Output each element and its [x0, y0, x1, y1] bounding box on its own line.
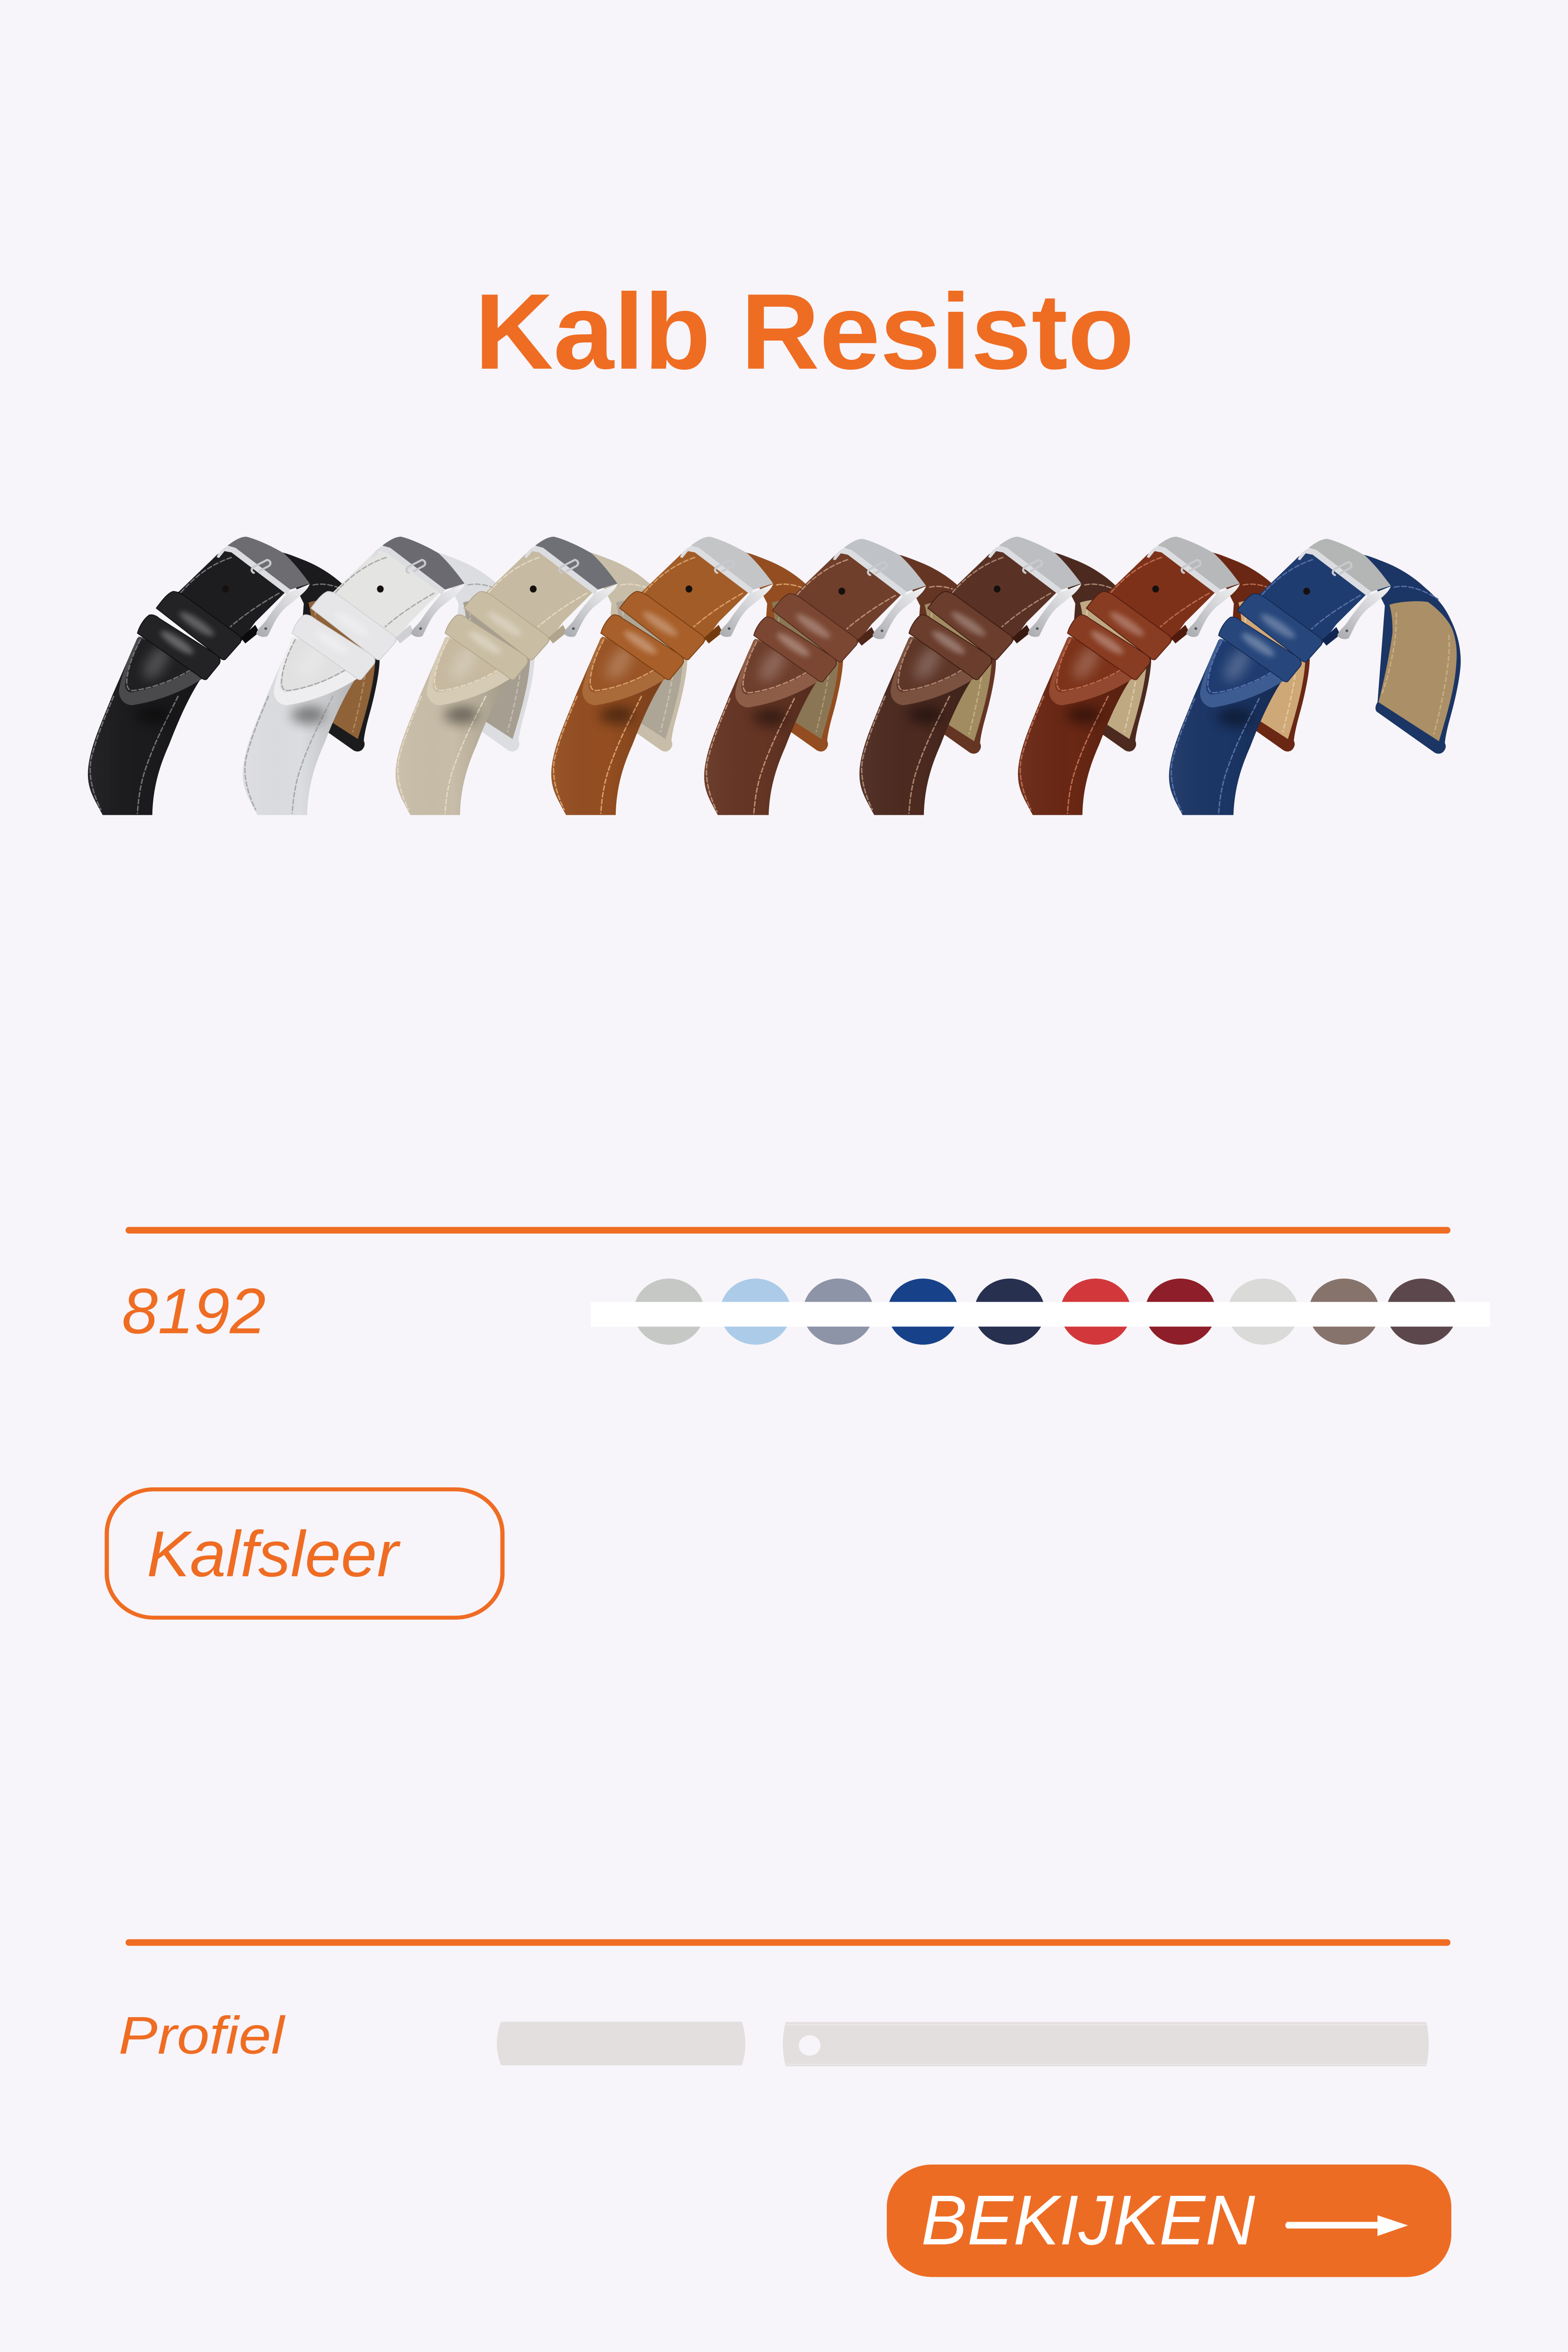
- white band over swatches: [591, 1302, 1490, 1327]
- watch strap row: [88, 537, 1461, 821]
- title: Kalb Resisto: [475, 272, 1134, 392]
- colour swatches: [634, 1279, 1457, 1345]
- strap: red brown: [1018, 537, 1310, 819]
- strap: navy: [1169, 539, 1461, 821]
- button: BEKIJKEN: [921, 2181, 1256, 2259]
- strap: medium brown: [704, 539, 996, 821]
- divider line bottom: [126, 1939, 1450, 1946]
- strap: beige: [396, 537, 687, 819]
- strap: dark brown: [860, 537, 1151, 819]
- profile shape long: [783, 2022, 1429, 2066]
- strap: white: [243, 537, 534, 819]
- button: [887, 2165, 1451, 2277]
- profile shape short: [497, 2022, 745, 2066]
- icon: arrow: [1285, 2215, 1408, 2236]
- material tag: Kalfsleer: [147, 1518, 401, 1590]
- article number: 8192: [122, 1275, 266, 1347]
- strap: tan: [551, 537, 843, 819]
- strap: black: [88, 537, 380, 819]
- material tag: [107, 1489, 502, 1618]
- profile label: Profiel: [119, 2006, 286, 2065]
- divider line top: [126, 1227, 1450, 1233]
